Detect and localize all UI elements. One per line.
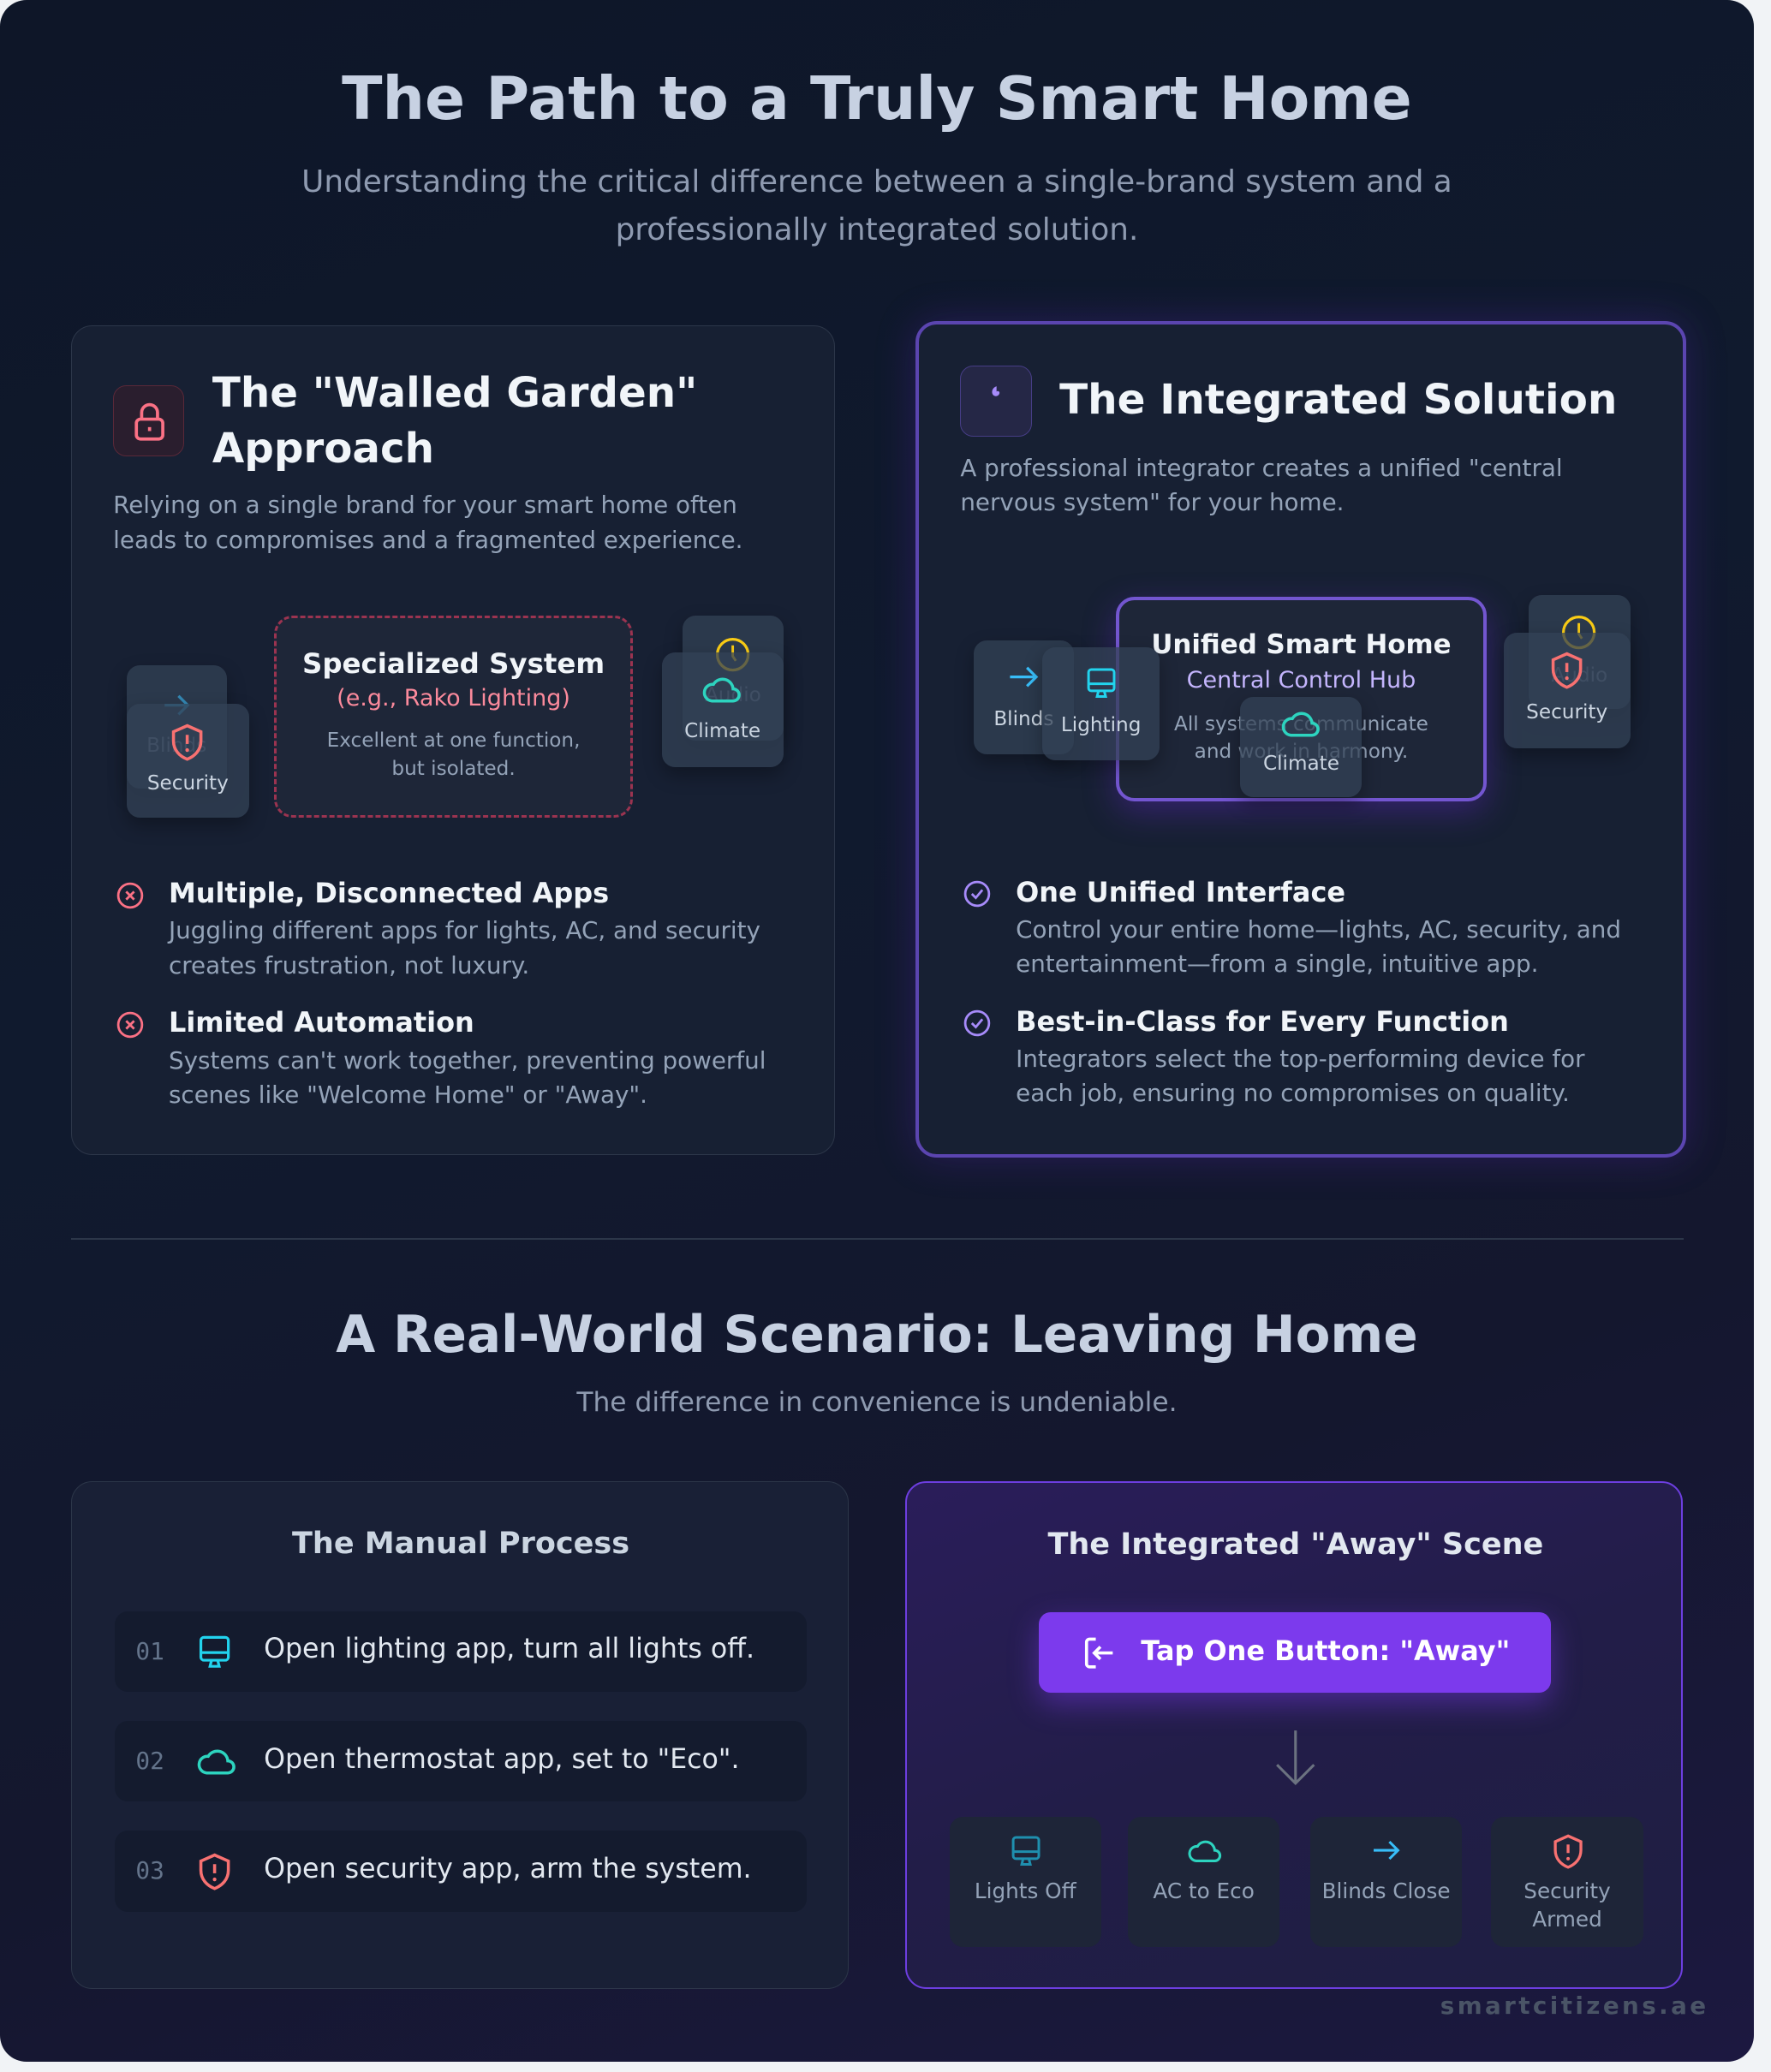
mini card: blinds: Blinds — [146, 735, 206, 757]
mini card: blinds — [127, 665, 227, 789]
icon: brain — [960, 366, 1032, 437]
button: away — [1039, 1612, 1551, 1693]
bullet: unified interface: entertainment—from a single, intuitive app. — [1016, 950, 1538, 978]
bullet: best in class: each job, ensuring no compromises on quality. — [1016, 1079, 1570, 1107]
bullet: best in class: Best-in-Class for Every Function — [1016, 1005, 1509, 1038]
step 02 — [115, 1721, 807, 1801]
step 01: 01 — [135, 1637, 164, 1665]
mini card: security: Security — [147, 772, 229, 795]
result: lights off: Lights Off — [975, 1878, 1076, 1903]
heading: The Integrated Solution — [1059, 376, 1617, 424]
step 01: Open lighting app, turn all lights off. — [264, 1634, 754, 1664]
specialized system box: Excellent at one function, — [327, 729, 580, 752]
description: A professional integrator creates a unified "central — [960, 454, 1563, 482]
bullet: limited automation: scenes like "Welcome Home" or "Away". — [169, 1081, 647, 1109]
result: ac eco: AC to Eco — [1153, 1878, 1255, 1903]
description: Relying on a single brand for your smart home often — [113, 491, 737, 519]
mini card: climate: Climate — [684, 720, 760, 742]
panel: manual process — [71, 1481, 849, 1989]
result: blinds — [1310, 1817, 1462, 1947]
description — [113, 491, 743, 554]
hub box: All systems communicate — [1174, 713, 1428, 735]
mini card: lighting: Lighting — [1061, 714, 1141, 736]
mini card: security — [127, 704, 249, 818]
result: security: Security — [1524, 1878, 1611, 1903]
step 03 — [115, 1831, 807, 1912]
bullet: unified interface: Control your entire home—lights, AC, security, and — [1016, 915, 1621, 944]
section subtitle: The difference in convenience is undeniable. — [576, 1387, 1178, 1418]
bullet: disconnected apps: Juggling different apps for lights, AC, and security — [169, 916, 760, 944]
bullet: limited automation: Limited Automation — [169, 1006, 474, 1039]
bullet: best in class: Integrators select the top-performing device for — [1016, 1045, 1585, 1073]
subtitle: Understanding the critical difference between a single-brand system and a — [301, 164, 1452, 199]
mini card: climate — [1240, 697, 1362, 797]
bullet: disconnected apps: Multiple, Disconnected Apps — [169, 877, 609, 909]
diagram: isolated system — [122, 616, 790, 825]
description: nervous system" for your home. — [960, 488, 1345, 516]
button: away: Tap One Button: "Away" — [1141, 1634, 1510, 1667]
title: The Path to a Truly Smart Home — [342, 65, 1412, 134]
mini card: climate: Climate — [1263, 753, 1339, 775]
footer: brand: smartcitizens.ae — [1440, 1992, 1708, 2020]
heading: The "Walled Garden" — [212, 369, 697, 417]
specialized system box: Specialized System — [302, 647, 605, 680]
icon: lock — [113, 385, 184, 456]
panel heading: The Manual Process — [292, 1526, 629, 1561]
mini card: lighting — [1042, 647, 1160, 760]
mini card: blinds: Blinds — [993, 708, 1053, 730]
description: leads to compromises and a fragmented experience. — [113, 526, 743, 554]
step 03: 03 — [135, 1856, 164, 1884]
mini card: audio: Audio — [1551, 664, 1607, 687]
step 02: 02 — [135, 1747, 164, 1775]
step 03: Open security app, arm the system. — [264, 1854, 752, 1884]
subtitle: professionally integrated solution. — [616, 212, 1138, 247]
mini card: security: Security — [1526, 701, 1607, 723]
result: security — [1491, 1817, 1643, 1947]
mini card: climate — [662, 652, 784, 767]
bullet: unified interface: One Unified Interface — [1016, 876, 1345, 908]
mini card: audio — [683, 616, 784, 741]
hub box: Unified Smart Home — [1151, 629, 1452, 660]
description — [960, 454, 1563, 516]
specialized system box: but isolated. — [391, 758, 516, 780]
panel heading: The Integrated "Away" Scene — [1047, 1527, 1543, 1562]
result: lights off — [950, 1817, 1101, 1947]
bullet: disconnected apps: creates frustration, not luxury. — [169, 950, 529, 979]
panel: away scene — [905, 1481, 1683, 1989]
panel: integrated solution — [915, 321, 1686, 1158]
specialized system box: (e.g., Rako Lighting) — [337, 685, 570, 712]
hub box — [1116, 597, 1487, 801]
step 01 — [115, 1611, 807, 1692]
bullet: disconnected apps — [116, 877, 760, 979]
hub box: Central Control Hub — [1187, 667, 1416, 694]
bullet: limited automation — [116, 1006, 766, 1109]
panel: walled garden — [71, 325, 835, 1155]
heading: Approach — [212, 425, 434, 473]
diagram: hub — [974, 591, 1636, 828]
subtitle — [301, 164, 1452, 247]
mini card: audio: Audio — [705, 684, 761, 706]
mini card: security — [1504, 633, 1631, 748]
hub box: and work in harmony. — [1195, 741, 1408, 763]
result: security: Armed — [1532, 1907, 1602, 1932]
step 02: Open thermostat app, set to "Eco". — [264, 1744, 740, 1775]
result: blinds: Blinds Close — [1322, 1878, 1451, 1903]
arrow: down — [1276, 1730, 1315, 1785]
bullet: best in class — [964, 1005, 1585, 1107]
bullet: unified interface — [964, 876, 1621, 978]
heading — [212, 369, 697, 473]
mini card: blinds — [974, 640, 1074, 754]
section heading: A Real-World Scenario: Leaving Home — [336, 1306, 1418, 1365]
mini card: audio — [1529, 595, 1631, 709]
specialized system box — [274, 616, 633, 818]
result: ac eco — [1128, 1817, 1279, 1947]
bullet: limited automation: Systems can't work together, preventing powerful — [169, 1046, 766, 1075]
